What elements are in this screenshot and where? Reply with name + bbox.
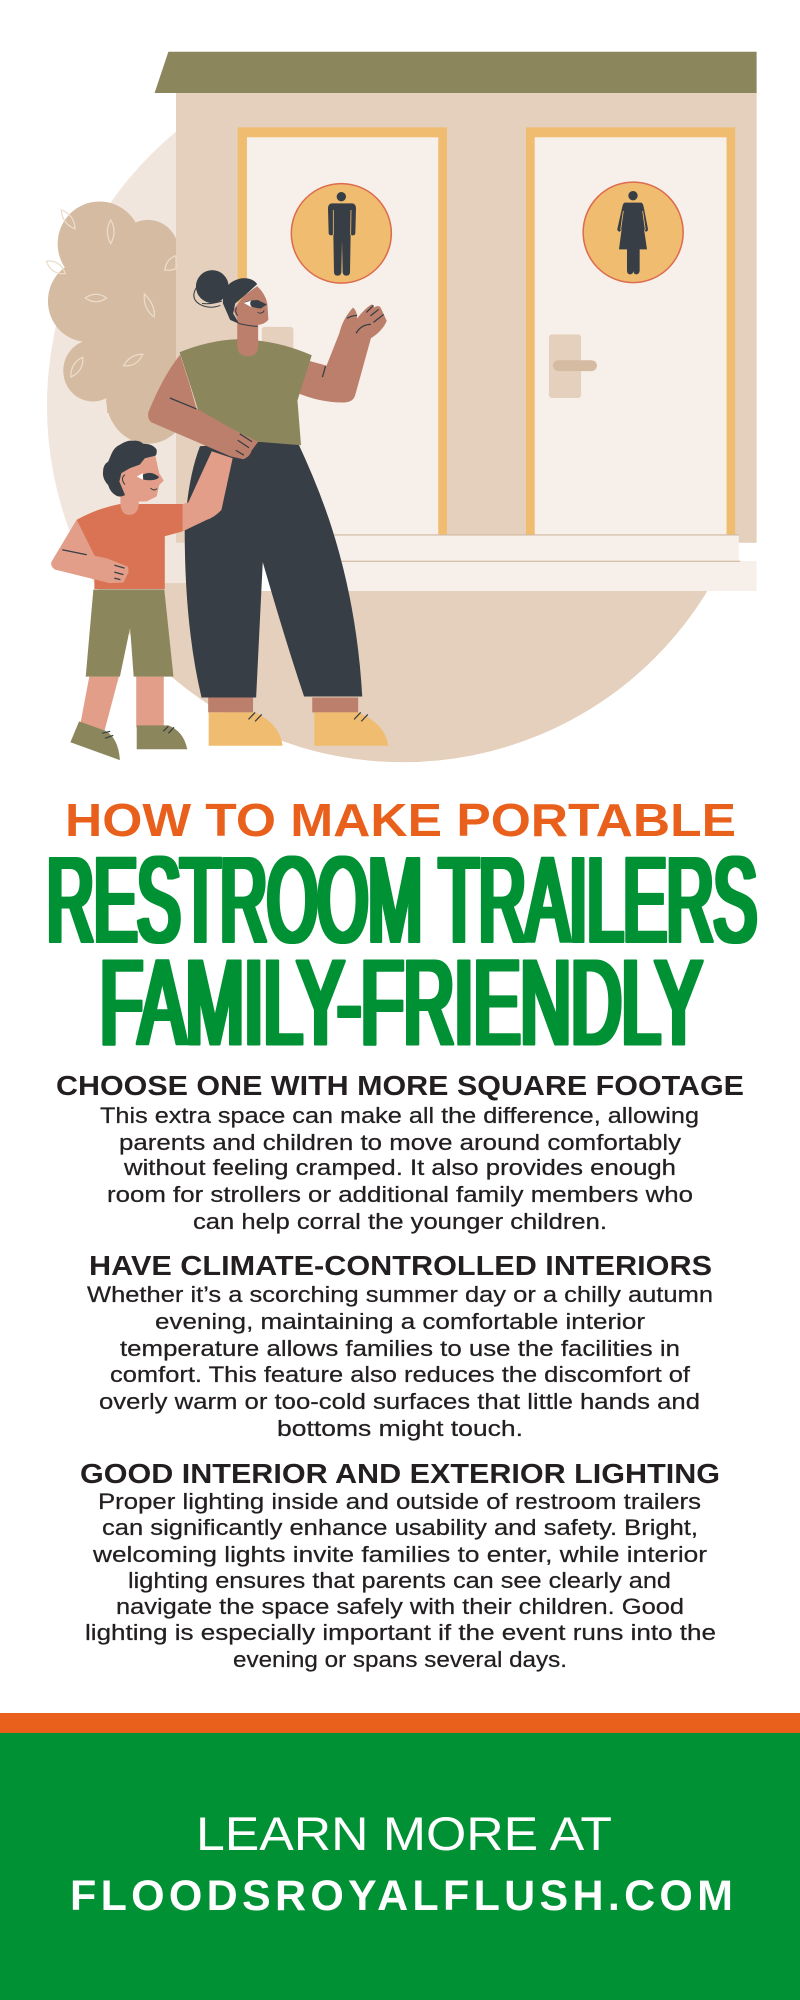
boy: legs xyxy=(81,677,164,730)
trailer steps xyxy=(306,534,757,591)
woman: ankles xyxy=(208,697,358,712)
woman: bent arm xyxy=(148,355,258,459)
icon: men's sign xyxy=(291,184,391,283)
orange divider band xyxy=(0,1713,800,1733)
boy: raised arm xyxy=(183,451,233,531)
footer: learn more: LEARN MORE AT xyxy=(196,1807,612,1860)
section 2 body xyxy=(87,1282,713,1441)
title main xyxy=(47,832,757,1070)
section 3 body xyxy=(85,1489,716,1672)
section 3 body: welcoming lights invite families to enter, while interior xyxy=(92,1542,707,1567)
section 3 body: evening or spans several days. xyxy=(233,1647,567,1672)
bush with leaves xyxy=(46,201,190,444)
right door xyxy=(526,127,735,535)
section 1 body: This extra space can make all the difference, allowing xyxy=(100,1103,699,1128)
boy: hair xyxy=(103,441,157,497)
boy: neck xyxy=(120,490,139,515)
footer panel xyxy=(0,1733,800,2000)
trailer building xyxy=(155,52,757,591)
section 1 body xyxy=(100,1103,699,1234)
section 1 body: without feeling cramped. It also provides enough xyxy=(123,1155,676,1180)
boy: shirt xyxy=(77,504,183,589)
boy: shorts xyxy=(86,590,173,677)
woman: left shoe xyxy=(209,712,283,746)
footer: website: FLOODSROYALFLUSH.COM xyxy=(70,1872,733,1920)
woman: shirt xyxy=(180,339,312,445)
section 2 heading: HAVE CLIMATE-CONTROLLED INTERIORS xyxy=(89,1250,712,1281)
woman: raised arm and hand xyxy=(297,304,387,403)
woman: face xyxy=(233,286,268,325)
section 1 heading: CHOOSE ONE WITH MORE SQUARE FOOTAGE xyxy=(56,1070,744,1101)
boy figure xyxy=(51,441,233,760)
section 3 body: lighting is especially important if the event runs into the xyxy=(85,1620,716,1645)
boy: bent arm and hand xyxy=(51,520,129,583)
section 2 body: bottoms might touch. xyxy=(277,1416,523,1441)
boy: right shoe xyxy=(137,725,187,749)
section 2 body: overly warm or too-cold surfaces that little hands and xyxy=(99,1389,700,1414)
section 1 body: room for strollers or additional family members who xyxy=(107,1182,693,1207)
boy: face xyxy=(119,455,164,501)
section 3 body: lighting ensures that parents can see clearly and xyxy=(128,1568,671,1593)
woman: neck xyxy=(237,318,258,356)
woman: right shoe xyxy=(314,712,388,746)
boy: left shoe xyxy=(70,721,120,760)
illustration: family at restroom trailer xyxy=(46,52,757,762)
section 1 body: can help corral the younger children. xyxy=(193,1209,607,1234)
section 2 body: evening, maintaining a comfortable interior xyxy=(155,1309,645,1334)
roof xyxy=(155,52,757,93)
section 3 body: Proper lighting inside and outside of restroom trailers xyxy=(98,1489,701,1514)
background circle xyxy=(47,132,708,762)
section 3 body: can significantly enhance usability and safety. Bright, xyxy=(102,1515,698,1540)
woman figure xyxy=(148,270,388,746)
boy: eye xyxy=(143,473,159,480)
section 3 heading: GOOD INTERIOR AND EXTERIOR LIGHTING xyxy=(80,1458,720,1489)
woman: hair bun xyxy=(196,270,229,303)
left door xyxy=(238,127,447,535)
icon: women's sign xyxy=(583,182,683,283)
section 1 body: parents and children to move around comfortably xyxy=(119,1130,681,1155)
section 2 body: temperature allows families to use the facilities in xyxy=(120,1336,680,1361)
section 2 body: Whether it’s a scorching summer day or a chilly autumn xyxy=(87,1282,713,1307)
woman: pants xyxy=(185,442,362,697)
woman: hair xyxy=(223,278,257,324)
title kicker: HOW TO MAKE PORTABLE xyxy=(65,794,736,846)
section 3 body: navigate the space safely with their children. Good xyxy=(116,1594,684,1619)
woman: eye xyxy=(245,300,267,308)
section 2 body: comfort. This feature also reduces the discomfort of xyxy=(110,1362,691,1387)
